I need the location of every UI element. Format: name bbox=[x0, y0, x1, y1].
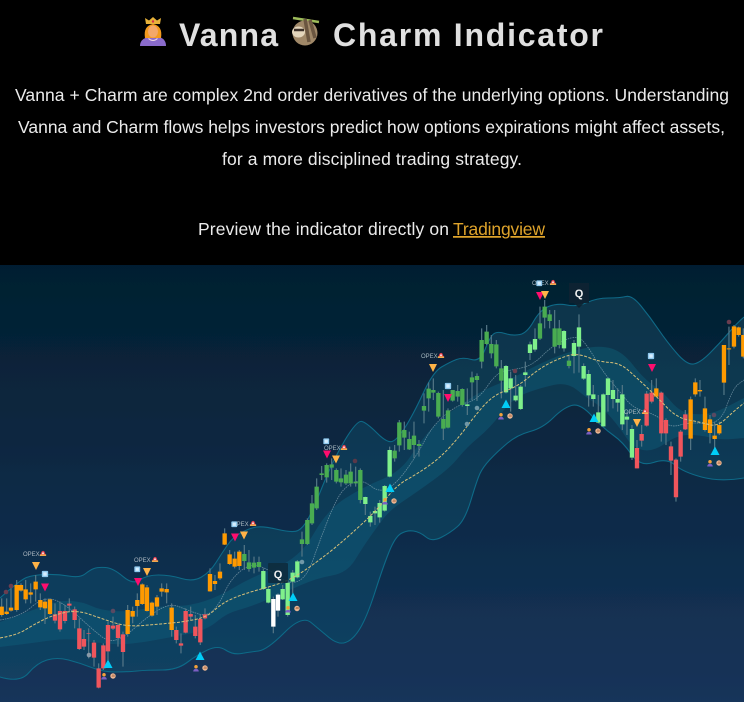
buy signal 2 bbox=[193, 652, 208, 672]
Q tag upper: Q bbox=[575, 288, 584, 300]
buy signal 6 bbox=[586, 414, 601, 434]
OPEX marker 5: OPEX bbox=[421, 354, 438, 360]
OPEX marker 3 bbox=[231, 521, 256, 542]
outer band lower edge bbox=[0, 405, 744, 679]
icon: queen emoji bbox=[140, 17, 166, 46]
wicks bbox=[2, 300, 743, 688]
cube and pink marker bbox=[648, 353, 656, 372]
light green candles bbox=[263, 327, 632, 615]
OPEX marker 7 bbox=[624, 409, 648, 427]
outer volatility band bbox=[0, 296, 744, 702]
white candles bbox=[273, 595, 278, 627]
yellow moving average bbox=[0, 355, 744, 638]
inner volatility band bbox=[0, 346, 744, 647]
title bbox=[140, 17, 603, 53]
OPEX marker 6: OPEX bbox=[532, 281, 549, 287]
thin grey moving average bbox=[0, 338, 744, 641]
intro paragraph: Vanna + Charm are complex 2nd order derivatives of the underlying options. Understanding bbox=[15, 85, 729, 105]
dark green candles bbox=[244, 307, 569, 569]
preview line with Tradingview link: Preview the indicator directly on bbox=[198, 219, 449, 239]
orange candles bbox=[2, 326, 743, 634]
chart panel bbox=[0, 265, 744, 702]
buy signal 5 bbox=[498, 400, 513, 420]
Q tag lower bbox=[268, 563, 288, 583]
OPEX marker 5 bbox=[421, 353, 452, 402]
OPEX marker 7: OPEX bbox=[624, 410, 641, 416]
Q tag lower: Q bbox=[274, 569, 283, 581]
OPEX marker 1: OPEX bbox=[23, 552, 40, 558]
OPEX marker 4: OPEX bbox=[324, 446, 341, 452]
heading word: Vanna: Vanna bbox=[179, 17, 278, 53]
OPEX marker 2: OPEX bbox=[134, 558, 151, 564]
intro paragraph: Vanna and Charm flows helps investors predict how options expirations might affect assets, bbox=[18, 117, 725, 137]
outer band upper edge bbox=[0, 296, 744, 598]
intro paragraph bbox=[15, 85, 729, 169]
indicator dots bbox=[4, 320, 731, 657]
buy signal 1 bbox=[101, 660, 116, 680]
OPEX marker 6 bbox=[532, 280, 556, 300]
icon: sloth emoji bbox=[292, 18, 319, 46]
Q tag upper bbox=[569, 283, 589, 308]
OPEX marker 3: OPEX bbox=[232, 522, 249, 528]
buy signal 4 bbox=[382, 484, 397, 504]
heading words: Charm Indicator: Charm Indicator bbox=[333, 17, 603, 53]
intro paragraph: for a more disciplined trading strategy. bbox=[222, 149, 522, 169]
preview line with Tradingview link: Tradingview bbox=[453, 219, 545, 239]
buy signal 7 bbox=[707, 446, 722, 466]
buy signal 3 bbox=[285, 592, 300, 612]
OPEX marker 4 bbox=[323, 438, 347, 464]
red candles bbox=[55, 393, 685, 688]
OPEX marker 2 bbox=[134, 557, 158, 586]
OPEX marker 1 bbox=[23, 551, 49, 592]
page background bbox=[0, 0, 744, 265]
